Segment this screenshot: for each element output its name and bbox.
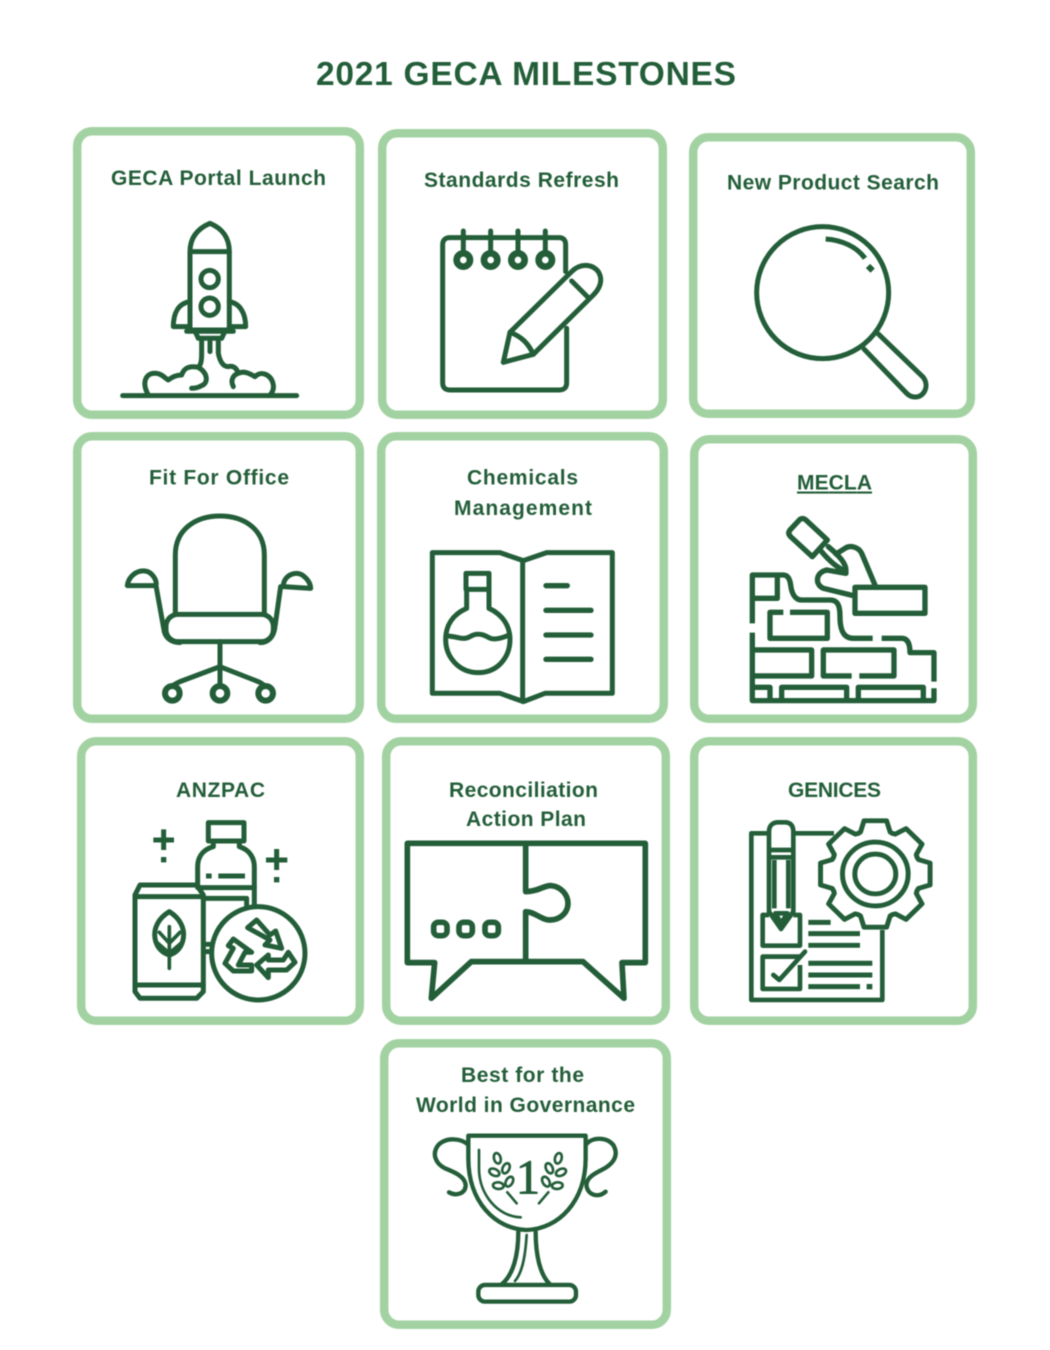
icon: checklist, pencil and gear (751, 821, 930, 1000)
heading: GECA Portal Launch (111, 167, 326, 190)
panel: Standards Refresh (382, 133, 663, 415)
heading: Best for the (461, 1064, 584, 1087)
title: 2021 GECA MILESTONES (316, 56, 736, 93)
icon: trowel and brick wall (752, 519, 934, 701)
icon: book with flask (432, 553, 612, 702)
card frame (77, 436, 360, 719)
heading: GENICES (788, 779, 881, 802)
heading: Action Plan (466, 808, 586, 831)
panel: Best for the World in Governance (384, 1043, 667, 1325)
heading (449, 779, 598, 831)
card frame (382, 133, 663, 415)
heading: ANZPAC (176, 779, 265, 802)
panel: ANZPAC (81, 741, 360, 1021)
heading: World in Governance (416, 1094, 635, 1117)
icon: trophy: 1 (516, 1151, 540, 1204)
heading: MECLA (797, 472, 872, 494)
card frame (386, 741, 666, 1021)
card frame (77, 131, 360, 415)
panel: Reconciliation Action Plan (386, 741, 666, 1021)
panel: Chemicals Management (381, 436, 664, 719)
card frame (81, 741, 360, 1021)
panel: GENICES (694, 741, 973, 1021)
heading (416, 1064, 635, 1117)
icon: puzzle speech bubbles (407, 843, 645, 998)
icon: magnifying glass (757, 227, 926, 397)
heading (454, 466, 592, 520)
panel: New Product Search (693, 137, 971, 414)
heading: Fit For Office (149, 466, 289, 490)
heading: New Product Search (727, 172, 939, 194)
card frame (694, 439, 973, 719)
icon: rocket (123, 223, 297, 396)
heading: Reconciliation (449, 779, 598, 802)
card frame (694, 741, 973, 1021)
panel: MECLA (694, 439, 973, 719)
icon: trophy (435, 1136, 616, 1302)
icon: notepad and pencil (443, 231, 601, 390)
panel: GECA Portal Launch (77, 131, 360, 415)
panel: Fit For Office (77, 436, 360, 719)
heading: Chemicals (467, 466, 578, 490)
heading: Standards Refresh (424, 169, 619, 192)
card frame (381, 436, 664, 719)
icon: office chair (127, 516, 311, 701)
heading: Management (454, 497, 592, 520)
card frame (693, 137, 971, 414)
icon: bottle, can and recycling symbol (135, 823, 305, 1000)
card frame (384, 1043, 667, 1325)
